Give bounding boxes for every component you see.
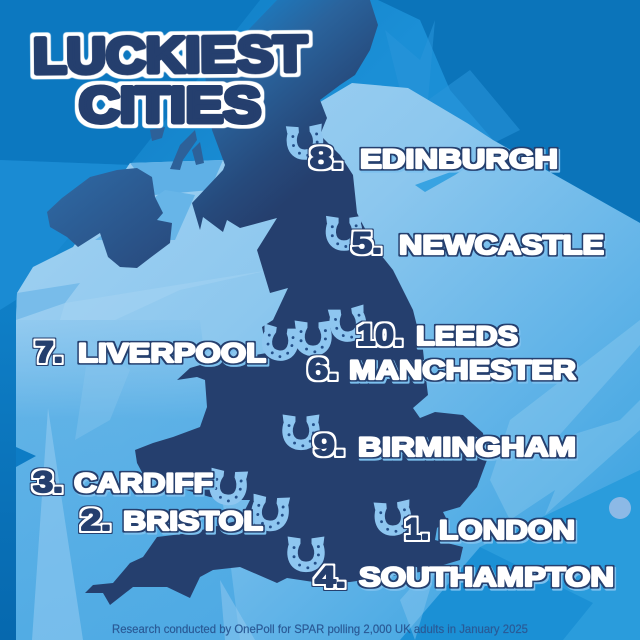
label: 3 Cardiff: CARDIFF — [74, 468, 213, 498]
horseshoe: Liverpool — [260, 324, 300, 360]
horseshoe: Southampton — [288, 537, 324, 569]
label: 2 Bristol — [81, 504, 263, 537]
title: CITIES — [79, 77, 261, 133]
label: 7 Liverpool: LIVERPOOL — [78, 338, 266, 368]
horseshoe: Manchester — [295, 321, 331, 353]
label: 10 Leeds: 10. — [357, 319, 403, 352]
label: 5 Newcastle: NEWCASTLE — [399, 230, 604, 260]
title — [33, 26, 307, 133]
label: 3 Cardiff: 3. — [33, 466, 63, 499]
label: 8 Edinburgh: EDINBURGH — [360, 144, 558, 174]
label: 4 Southampton: SOUTHAMPTON — [359, 562, 614, 592]
horseshoe: Bristol — [250, 494, 290, 530]
label: 10 Leeds: LEEDS — [416, 321, 518, 351]
map: Scottish islands — [150, 127, 204, 170]
label: 9 Birmingham: BIRMINGHAM — [358, 432, 576, 462]
label: 1 London: LONDON — [439, 515, 575, 545]
label: 8 Edinburgh — [310, 142, 558, 175]
title: LUCKIEST — [33, 26, 307, 84]
label: 9 Birmingham — [314, 429, 576, 462]
horseshoe: Edinburgh — [286, 124, 324, 158]
label: 8 Edinburgh: 8. — [310, 142, 343, 175]
label: 2 Bristol: 2. — [81, 504, 111, 537]
label: 5 Newcastle — [352, 227, 604, 260]
label: 6 Manchester: MANCHESTER — [349, 355, 576, 385]
label: 7 Liverpool — [35, 336, 266, 369]
label: 1 London — [405, 513, 575, 546]
label: 9 Birmingham: 9. — [314, 429, 345, 462]
label: 10 Leeds — [357, 319, 518, 352]
label: 1 London: 1. — [405, 513, 429, 546]
horseshoe: Newcastle — [326, 216, 362, 248]
horseshoe: Cardiff — [208, 468, 248, 504]
label: 3 Cardiff — [33, 466, 213, 499]
label: 6 Manchester: 6. — [308, 353, 338, 386]
label: 5 Newcastle: 5. — [352, 227, 382, 260]
map: Northern Ireland — [47, 168, 172, 268]
label: 7 Liverpool: 7. — [35, 336, 63, 369]
decorative circle — [609, 497, 631, 519]
map: Great Britain — [85, 0, 487, 605]
source footnote: Research conducted by OnePoll for SPAR polling 2,000 UK adults in January 2025 — [112, 622, 528, 636]
label: 6 Manchester — [308, 353, 576, 386]
horseshoe: London — [374, 499, 412, 534]
horseshoe: Leeds — [328, 305, 368, 341]
horseshoe: Birmingham — [283, 415, 319, 447]
label: 2 Bristol: BRISTOL — [123, 506, 263, 536]
label: 4 Southampton: 4. — [315, 561, 346, 594]
label: 4 Southampton — [315, 561, 614, 594]
